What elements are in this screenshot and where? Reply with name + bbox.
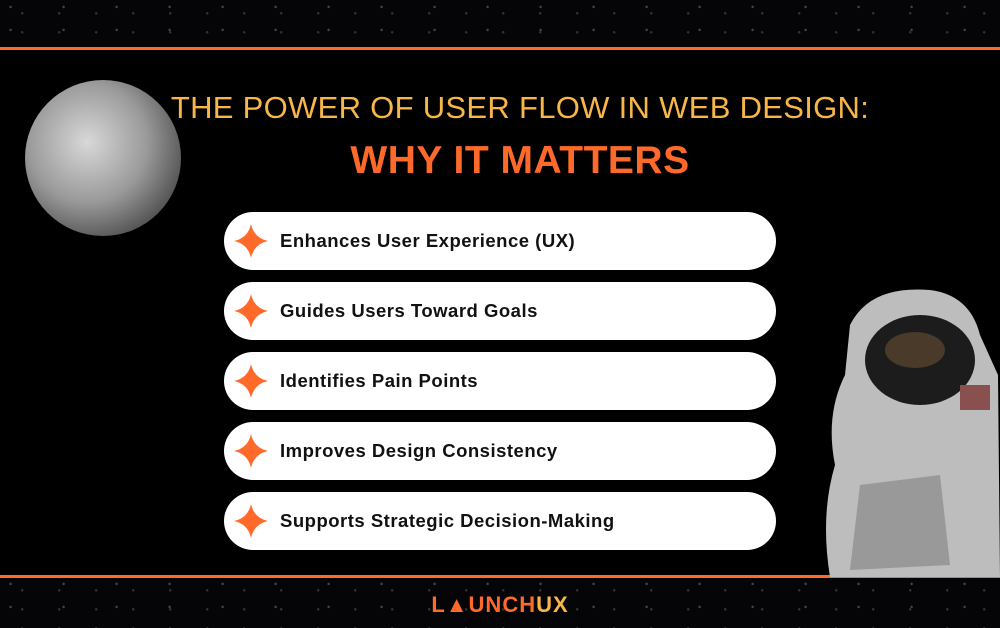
icon: earth <box>25 80 181 236</box>
item 3 <box>224 352 776 410</box>
item 4 <box>224 422 776 480</box>
top starry band <box>0 0 1000 48</box>
bottom starry band <box>0 577 1000 628</box>
subtitle: WHY IT MATTERS <box>350 139 690 182</box>
logo: L▲UNCHUX <box>431 592 569 617</box>
title: THE POWER OF USER FLOW IN WEB DESIGN: <box>171 90 869 125</box>
illustration: astronaut <box>826 290 1000 577</box>
item 3: Identifies Pain Points <box>280 370 478 391</box>
item 5: Supports Strategic Decision-Making <box>280 510 615 531</box>
item 2 <box>224 282 776 340</box>
item 2: Guides Users Toward Goals <box>280 300 538 321</box>
item 4: Improves Design Consistency <box>280 440 558 461</box>
item 1: Enhances User Experience (UX) <box>280 230 575 251</box>
item 1 <box>224 212 776 270</box>
list of benefits <box>224 212 776 550</box>
item 5 <box>224 492 776 550</box>
